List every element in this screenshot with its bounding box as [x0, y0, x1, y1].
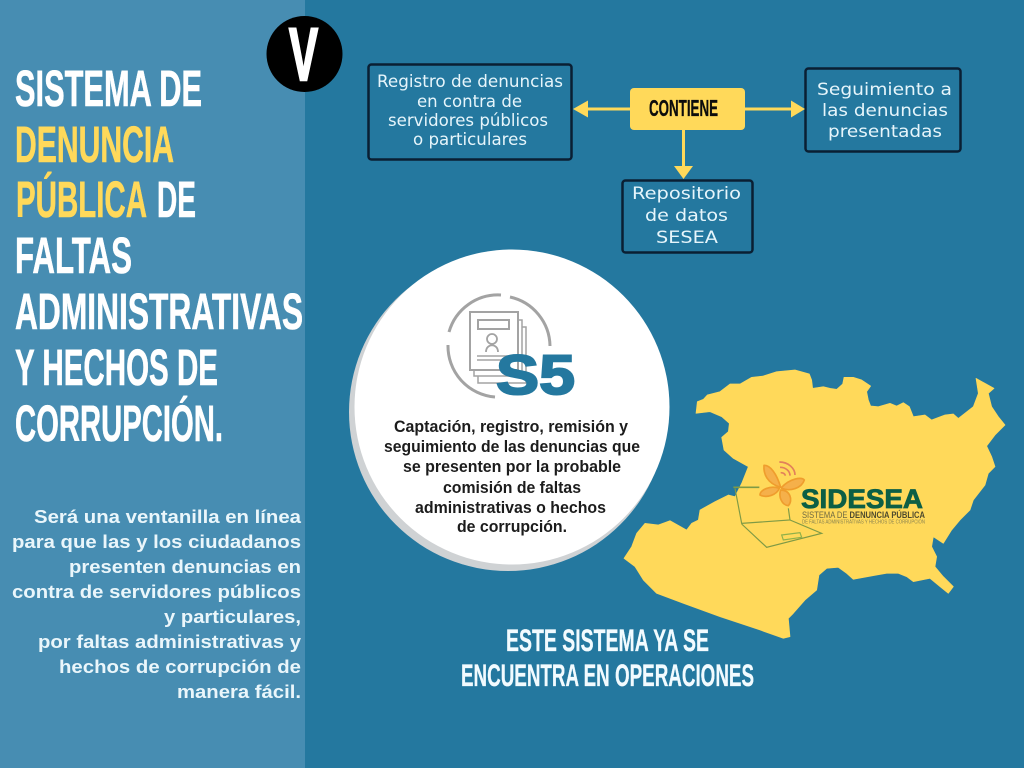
- box: repositorio: [622, 180, 752, 252]
- text block: S5 description: administrativas o hechos: [415, 499, 606, 517]
- text block: description: presenten denuncias en: [69, 556, 301, 577]
- panel: S5 circle: [349, 250, 670, 571]
- text block: S5 description: se presenten por la probable: [403, 458, 621, 476]
- title: SISTEMA DE: [15, 60, 202, 117]
- title: PÚBLICA: [16, 171, 147, 228]
- text block: S5 description: comisión de faltas: [443, 479, 581, 497]
- text block: S5 description: seguimiento de las denuncias que: [384, 438, 640, 456]
- title: [15, 60, 303, 452]
- box: seguimiento: las denuncias: [822, 101, 948, 120]
- logo: SIDESEA: SIDESEA: [801, 484, 923, 514]
- box: registro de denuncias: [368, 64, 572, 160]
- text block: S5 description: de corrupción.: [457, 518, 567, 536]
- text block: description: hechos de corrupción de: [59, 656, 301, 677]
- box: registro de denuncias: o particulares: [413, 130, 527, 149]
- text block: description: y particulares,: [164, 606, 301, 627]
- box: seguimiento: [806, 68, 960, 152]
- callout: en operaciones: ENCUENTRA EN OPERACIONES: [461, 657, 754, 693]
- text block: description: para que las y los ciudadanos: [12, 531, 301, 552]
- icon: S5 document: [448, 295, 575, 406]
- label: contiene: [630, 88, 745, 130]
- panel: left sidebar: [0, 0, 305, 768]
- icon: wifi: [779, 462, 795, 476]
- badge: V: [266, 13, 342, 96]
- box: repositorio: Repositorio: [632, 184, 741, 203]
- callout: en operaciones: ESTE SISTEMA YA SE: [506, 622, 709, 658]
- arrow: left: [573, 100, 631, 118]
- title: Y HECHOS DE: [15, 339, 218, 396]
- text block: description: manera fácil.: [177, 681, 301, 702]
- arrow: down: [674, 129, 693, 179]
- box: seguimiento: Seguimiento a: [817, 80, 952, 99]
- box: registro de denuncias: Registro de denuncias: [377, 72, 563, 91]
- text block: description: [12, 506, 302, 702]
- callout: en operaciones: [461, 622, 754, 693]
- title: CORRUPCIÓN.: [15, 395, 223, 452]
- title: DENUNCIA: [15, 116, 174, 173]
- box: repositorio: de datos: [645, 206, 728, 225]
- box: seguimiento: presentadas: [828, 122, 942, 141]
- logo: SIDESEA: [733, 462, 925, 547]
- box: repositorio: SESEA: [656, 228, 719, 247]
- text block: description: contra de servidores públicos: [12, 581, 301, 602]
- title: DE: [157, 171, 196, 228]
- logo: SIDESEA: DE FALTAS ADMINISTRATIVAS Y HECHOS DE CORRUPCIÓN: [802, 518, 925, 526]
- text block: description: Será una ventanilla en línea: [34, 506, 302, 527]
- title: ADMINISTRATIVAS: [15, 283, 303, 340]
- text block: S5 description: Captación, registro, remisión y: [394, 418, 628, 436]
- map: Michoacán: [624, 370, 1005, 638]
- title: FALTAS: [15, 227, 132, 284]
- icon: S5 document: S5: [496, 343, 575, 406]
- box: registro de denuncias: servidores públicos: [388, 111, 548, 130]
- icon: laptop: [733, 487, 822, 547]
- logo: SIDESEA: SISTEMA DE DENUNCIA PÚBLICA: [802, 509, 925, 520]
- text block: description: por faltas administrativas y: [38, 631, 302, 652]
- badge: V: V: [289, 13, 318, 96]
- text block: S5 description: [384, 418, 640, 536]
- box: registro de denuncias: en contra de: [417, 92, 522, 111]
- arrow: right: [744, 100, 805, 118]
- icon: butterfly: [760, 465, 804, 506]
- label: contiene: CONTIENE: [649, 95, 718, 121]
